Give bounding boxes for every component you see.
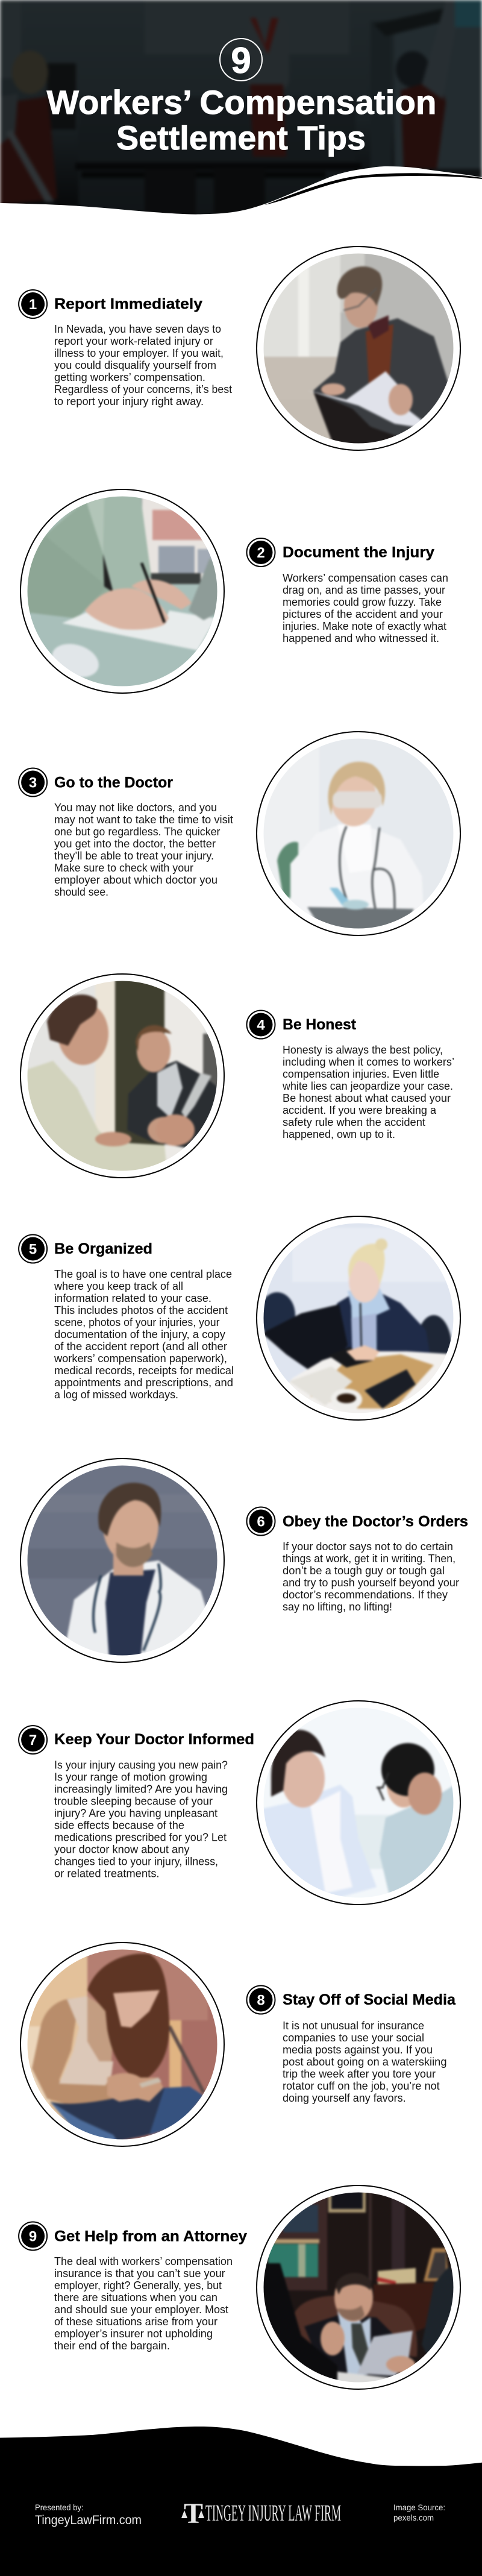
tip 5 body text: a log of missed workdays.	[54, 1389, 178, 1401]
tip 3: go to the doctor	[19, 732, 460, 935]
tip 5 body text	[54, 1268, 234, 1401]
tip 8 body text: doing yourself any favors.	[283, 2092, 406, 2104]
hero banner	[0, 0, 482, 253]
tip 3 body text: should see.	[54, 886, 108, 898]
tip 2 body text: injuries. Make note of exactly what	[283, 620, 446, 632]
tip 5 number badge: 5	[29, 1242, 37, 1257]
tip 7 body text	[54, 1759, 228, 1880]
tip 7 body text: trouble sleeping because of your	[54, 1795, 213, 1808]
tip 1 body text: you could disqualify yourself from	[54, 359, 216, 371]
tip 3 number badge: 3	[29, 775, 37, 791]
tip 5 heading: Be Organized	[54, 1240, 152, 1257]
tip 2 heading: Document the Injury	[283, 544, 434, 561]
tip 3 body text: you get into the doctor, the better	[54, 838, 216, 850]
tip 1 body text: illness to your employer. If you wait,	[54, 347, 224, 359]
title: Settlement Tips	[116, 119, 366, 157]
tip 7 photo: doctor with patient	[257, 1701, 460, 1905]
tip 2 body text: Workers’ compensation cases can	[283, 572, 448, 584]
tip 9 number badge	[19, 2222, 47, 2251]
tip 3 number badge	[19, 768, 47, 797]
tip 3 body text: they’ll be able to treat your injury.	[54, 850, 214, 862]
tip 9 heading: Get Help from an Attorney	[54, 2228, 247, 2245]
tip 7 body text: medications prescribed for you? Let	[54, 1832, 227, 1844]
tip 1 body text: report your work-related injury or	[54, 335, 213, 347]
tip 4 body text: Honesty is always the best policy,	[283, 1044, 443, 1056]
tip 8 number badge: 8	[257, 1993, 265, 2008]
presented by: TingeyLawFirm.com	[35, 2513, 142, 2527]
tip 6 body text: things at work, get it in writing. Then,	[283, 1553, 455, 1565]
tip 4: be honest	[20, 974, 454, 1178]
tip 5 body text: workers’ compensation paperwork),	[54, 1352, 227, 1365]
tip 9 body text: and should sue your employer. Most	[54, 2304, 228, 2316]
tip 5 body text: The goal is to have one central place	[54, 1268, 232, 1280]
tip 9 body text	[54, 2255, 233, 2352]
tip 3 body text: Make sure to check with your	[54, 862, 193, 874]
tip 4 body text: happened, own up to it.	[283, 1128, 395, 1140]
tip 7 body text: your doctor know about any	[54, 1844, 189, 1856]
presented by	[35, 2502, 142, 2527]
image source	[393, 2502, 445, 2522]
tip 8 body text: companies to use your social	[283, 2032, 424, 2044]
tip 1 number badge	[19, 290, 47, 318]
tip 7 body text: increasingly limited? Are you having	[54, 1783, 228, 1795]
tip 4 body text: compensation injuries. Even little	[283, 1068, 439, 1080]
tip 6 body text	[283, 1541, 459, 1613]
tip 8 body text: trip the week after you tore your	[283, 2068, 436, 2080]
tip 8 heading: Stay Off of Social Media	[283, 1991, 456, 2008]
tip 7 body text: or related treatments.	[54, 1868, 159, 1880]
footer wave background	[0, 2427, 482, 2576]
tip 9 body text: of these situations arise from your	[54, 2316, 218, 2328]
tip 3 body text: employer about which doctor you	[54, 874, 218, 886]
tip 6 number badge	[247, 1507, 275, 1536]
tip 6 number badge: 6	[257, 1514, 265, 1530]
tip 6 heading: Obey the Doctor’s Orders	[283, 1513, 468, 1530]
tip 1 body text: Regardless of your concerns, it’s best	[54, 383, 232, 395]
tip 5 photo: businesswoman at desk	[257, 1216, 460, 1420]
tip 7 number badge	[19, 1726, 47, 1754]
tip 8: stay off of social media	[20, 1943, 456, 2147]
tip 9 body text: insurance is that you can’t sue your	[54, 2267, 225, 2279]
tip 5 number badge	[19, 1234, 47, 1263]
tip 8 body text: It is not unusual for insurance	[283, 2020, 424, 2032]
tip 4 body text: accident. If you were breaking a	[283, 1104, 437, 1116]
tip 2 body text: memories could grow fuzzy. Take	[283, 596, 442, 608]
tip 6 body text: say no lifting, no lifting!	[283, 1601, 392, 1613]
tip 7 heading: Keep Your Doctor Informed	[54, 1731, 254, 1748]
tip 8 body text: media posts against you. If you	[283, 2044, 433, 2056]
tip 7 body text: Is your range of motion growing	[54, 1771, 207, 1783]
hero worker right	[396, 0, 482, 169]
tip 6 body text: and try to push yourself beyond your	[283, 1577, 459, 1589]
tip 7: keep your doctor informed	[19, 1701, 460, 1905]
tip 4 body text: white lies can jeopardize your case.	[282, 1080, 453, 1092]
tip 1 body text: getting workers’ compensation.	[54, 371, 205, 383]
tip 4 heading: Be Honest	[283, 1016, 357, 1033]
tip 8 number badge	[247, 1985, 275, 2014]
tip 8 photo: woman on phone	[20, 1943, 224, 2147]
tip 2 body text: happened and who witnessed it.	[283, 632, 439, 644]
tip 5 body text: appointments and prescriptions, and	[54, 1377, 233, 1389]
tip 2: document the injury	[20, 489, 448, 693]
tip 2 body text	[283, 572, 448, 644]
tip 5 body text: of the accident report (and all other	[54, 1340, 227, 1352]
tip 7 body text: changes tied to your injury, illness,	[54, 1856, 218, 1868]
tip 7 body text: injury? Are you having unpleasant	[54, 1808, 218, 1820]
tip 5: be organized	[19, 1216, 460, 1420]
tip 6 body text: doctor’s recommendations. If they	[283, 1589, 448, 1601]
tip 2 photo: writing hand	[20, 489, 224, 693]
tip 5 body text: information related to your case.	[54, 1292, 211, 1304]
tip 2 number badge: 2	[257, 545, 265, 561]
hero white wave	[0, 166, 482, 253]
hero worker centre	[247, 18, 289, 157]
tip 1 body text	[54, 323, 232, 407]
tip 5 body text: medical records, receipts for medical	[54, 1365, 234, 1377]
hero wave black accent	[264, 173, 482, 205]
tip 8 body text	[283, 2020, 447, 2104]
tip 3 photo: smiling doctor	[257, 732, 460, 935]
tip 5 body text: scene, photos of your injuries, your	[54, 1316, 219, 1328]
tip 9 body text: employer’s insurer not upholding	[54, 2328, 213, 2340]
title number badge	[220, 39, 262, 81]
presented by: Presented by:	[35, 2502, 84, 2512]
tip 4 number badge	[247, 1010, 275, 1039]
tip 2 body text: drag on, and as time passes, your	[283, 584, 445, 596]
tip 7 number badge: 7	[29, 1732, 37, 1748]
tip 6 body text: don’t be a tough guy or tough gal	[283, 1565, 445, 1577]
tip 1: report immediately	[19, 247, 460, 450]
title	[47, 83, 436, 157]
tip 9 body text: there are situations when you can	[54, 2292, 218, 2304]
tip 9: get help from an attorney	[19, 2185, 460, 2389]
tip 1 heading: Report Immediately	[54, 295, 202, 312]
tip 1 body text: In Nevada, you have seven days to	[54, 323, 221, 335]
footer band	[0, 2427, 482, 2576]
tip 3 heading: Go to the Doctor	[54, 774, 173, 791]
tip 8 body text: rotator cuff on the job, you’re not	[283, 2080, 440, 2092]
tip 4 body text	[282, 1044, 454, 1140]
tip 6: obey the doctor's orders	[20, 1459, 468, 1663]
logo: scales and T mark with firm name	[181, 2498, 341, 2530]
tip 4 body text: Be honest about what caused your	[283, 1092, 451, 1104]
title: Workers’ Compensation	[47, 83, 436, 121]
tip 8 body text: post about going on a waterskiing	[283, 2056, 447, 2068]
tip 5 body text: This includes photos of the accident	[54, 1304, 228, 1316]
tip 4 number badge: 4	[257, 1017, 265, 1033]
title number badge: 9	[231, 40, 251, 81]
tip 3 body text	[54, 802, 233, 898]
tip 1 number badge: 1	[29, 297, 37, 313]
hero background photo	[0, 0, 482, 241]
tip 9 photo: attorney reading document	[257, 2185, 460, 2389]
tip 3 body text: may not want to take the time to visit	[54, 814, 233, 826]
tip 3 body text: You may not like doctors, and you	[54, 802, 217, 814]
tip 6 body text: If your doctor says not to do certain	[283, 1541, 453, 1553]
logo mark: T	[184, 2498, 203, 2530]
image source: pexels.com	[393, 2513, 434, 2522]
tip 6 photo: male doctor	[20, 1459, 224, 1663]
image source: Image Source:	[393, 2502, 445, 2512]
tip 9 body text: The deal with workers’ compensation	[54, 2255, 233, 2267]
tip 5 body text: where you keep track of all	[54, 1280, 183, 1292]
tip 4 body text: including when it comes to workers’	[283, 1056, 454, 1068]
tip 9 body text: employer, right? Generally, yes, but	[54, 2279, 222, 2292]
tip 1 photo: man reading papers	[257, 247, 460, 450]
tip 4 body text: safety rule when the accident	[283, 1116, 425, 1128]
tip 7 body text: side effects because of the	[54, 1820, 184, 1832]
hero worker left	[0, 51, 57, 205]
tip 2 body text: pictures of the accident and your	[283, 608, 443, 620]
tip 5 body text: documentation of the injury, a copy	[54, 1328, 225, 1340]
tip 7 body text: Is your injury causing you new pain?	[54, 1759, 228, 1771]
tip 9 body text: their end of the bargain.	[54, 2340, 170, 2352]
tip 9 number badge: 9	[29, 2229, 37, 2245]
tip 2 number badge	[247, 538, 275, 567]
tip 1 body text: to report your injury right away.	[54, 395, 204, 407]
tip 3 body text: one but go regardless. The quicker	[54, 826, 221, 838]
tip 4 photo: two men with tablet	[20, 974, 224, 1178]
